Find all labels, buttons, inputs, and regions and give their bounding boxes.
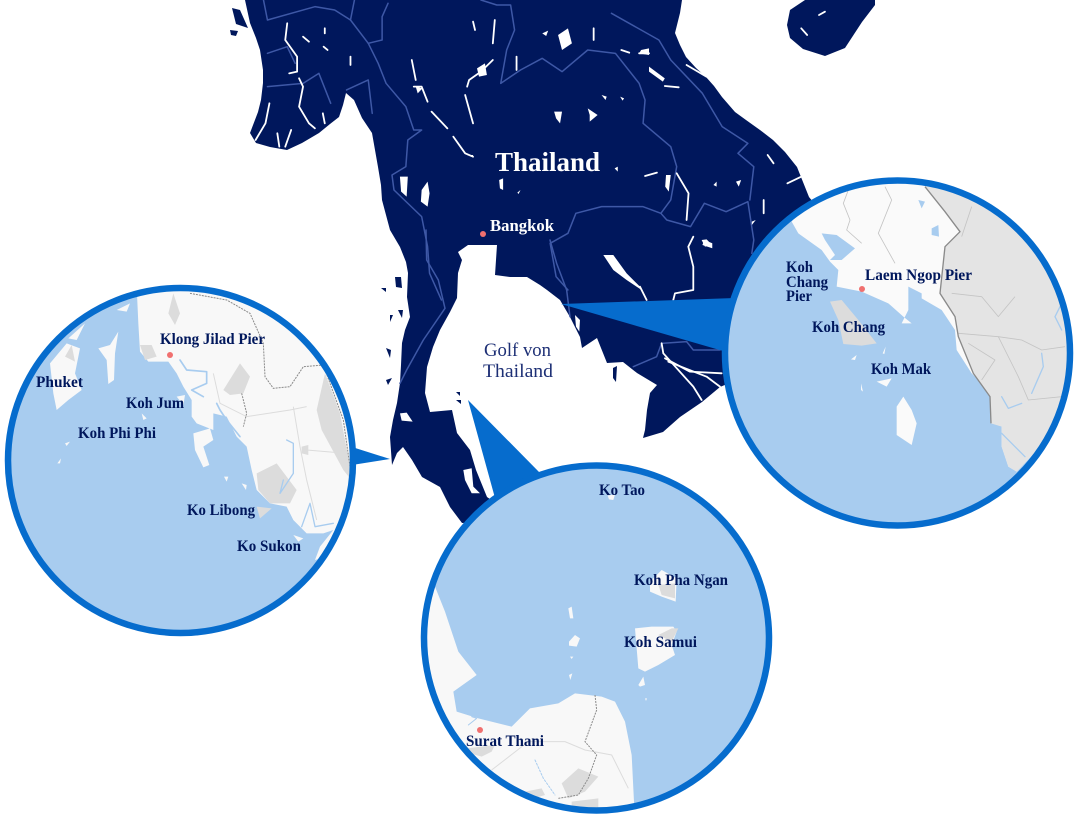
label: Koh Chang Pier: Koh	[786, 259, 813, 276]
rivers and delta	[400, 237, 722, 493]
border	[558, 695, 597, 798]
land: southern mainland	[427, 587, 634, 808]
marker: Bangkok	[480, 231, 486, 237]
land: Hainan	[787, 0, 875, 56]
label: Koh Chang: Koh Chang	[812, 319, 885, 336]
water inlets	[180, 360, 207, 397]
rivers and lakes	[256, 12, 825, 248]
inset: Andaman coast	[8, 280, 367, 633]
label: Golf von Thailand	[483, 340, 554, 382]
land: white coast	[792, 184, 1032, 472]
label: Phuket: Phuket	[36, 374, 84, 391]
label: Ko Libong: Ko Libong	[187, 502, 255, 519]
borders	[190, 293, 350, 467]
label: Golf von Thailand: Thailand	[483, 361, 554, 382]
pointer: to left inset	[352, 447, 390, 465]
label: Koh Phi Phi: Koh Phi Phi	[78, 425, 157, 442]
border	[925, 187, 991, 423]
ring	[8, 288, 353, 633]
label: Koh Chang Pier: Pier	[786, 288, 812, 305]
land: Koh Pha Ngan	[650, 570, 677, 602]
marker: Klong Jilad Pier	[167, 352, 173, 358]
roads	[213, 373, 307, 417]
grey areas	[467, 583, 678, 812]
label: Koh Pha Ngan: Koh Pha Ngan	[634, 572, 728, 589]
land: Phu Quoc	[613, 366, 617, 382]
heading: Thailand: Thailand	[495, 147, 600, 177]
rivers	[843, 190, 862, 243]
borders	[263, 0, 754, 300]
land: Phuket island	[50, 343, 82, 410]
label: Koh Jum: Koh Jum	[126, 395, 185, 412]
label: Laem Ngop Pier: Laem Ngop Pier	[865, 267, 972, 284]
land: mainland	[245, 0, 860, 523]
land: Koh Chang	[830, 300, 877, 346]
marker: Surat Thani	[477, 727, 483, 733]
map: mainland Southeast Asia	[230, 0, 875, 523]
land: western islands	[230, 8, 461, 404]
label: Golf von Thailand: Golf von	[484, 340, 551, 361]
pointer: to right inset	[561, 298, 735, 353]
water inlets	[822, 200, 939, 260]
label: Surat Thani: Surat Thani	[466, 733, 545, 750]
ring	[725, 180, 1070, 526]
grey areas	[65, 293, 357, 518]
label: Klong Jilad Pier: Klong Jilad Pier	[160, 331, 265, 348]
marker: Laem Ngop Pier	[859, 286, 865, 292]
label: Koh Mak: Koh Mak	[871, 361, 931, 378]
roads	[492, 742, 628, 788]
land: small islands	[851, 347, 917, 445]
inset: Koh Chang area	[725, 170, 1080, 526]
label: Bangkok: Bangkok	[490, 216, 555, 235]
label: Koh Chang Pier	[786, 259, 828, 305]
ring	[424, 466, 769, 810]
label: Ko Sukon: Ko Sukon	[237, 538, 301, 555]
label: Koh Chang Pier: Chang	[786, 274, 828, 291]
label: Koh Samui: Koh Samui	[624, 634, 698, 651]
inset: Gulf islands	[415, 466, 769, 819]
land: grey neighbouring area	[926, 186, 1067, 472]
land: mainland west coast	[137, 291, 350, 560]
label: Ko Tao: Ko Tao	[599, 482, 645, 499]
land: small islands	[568, 494, 647, 701]
pointer: to bottom inset	[468, 400, 540, 498]
land: Koh Samui	[635, 627, 677, 672]
